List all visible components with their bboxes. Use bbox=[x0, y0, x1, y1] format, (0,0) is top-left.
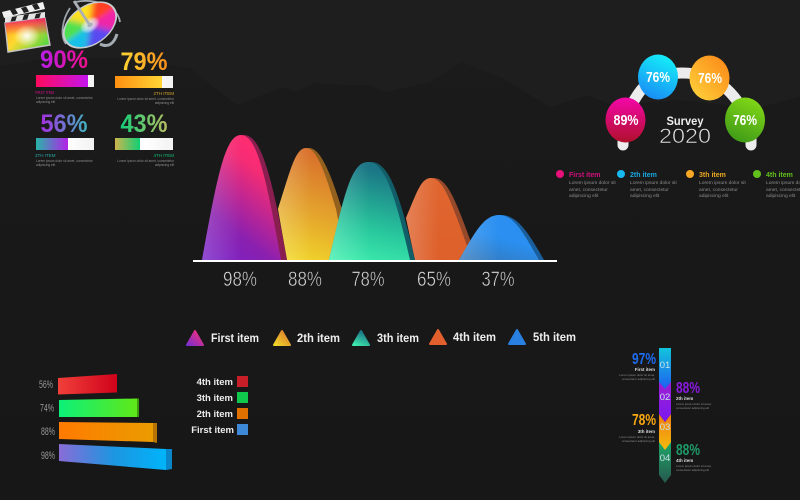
legend: hills: 3th item bbox=[377, 333, 419, 345]
value labels: 78% bbox=[352, 268, 384, 291]
circle 76 percent orange bbox=[690, 56, 730, 100]
stat: 43 percent: adipiscing elit bbox=[155, 163, 174, 167]
stat: 56 percent bbox=[35, 110, 94, 167]
legend: horizontal bars bbox=[191, 376, 248, 436]
stat: 43 percent: Lorem ipsum dolor sit amet, consectetur bbox=[117, 159, 175, 163]
legend: survey: First item bbox=[569, 172, 601, 179]
step 88 percent green: 88% bbox=[676, 442, 700, 459]
stat: 79 percent bbox=[115, 48, 175, 105]
stat: 90 percent bbox=[35, 46, 94, 104]
stat: 43 percent bbox=[115, 110, 175, 167]
legend: survey: Lorem ipsum dolor sit bbox=[630, 180, 677, 186]
chart: 3D horizontal bars bbox=[39, 374, 172, 470]
step numbers: 01 bbox=[660, 360, 670, 371]
step 88 percent purple: 2th item bbox=[676, 396, 693, 401]
value labels: 98% bbox=[223, 268, 257, 291]
step 88 percent green: consectetur adipiscing elit bbox=[676, 468, 709, 472]
legend: hills: 4th item bbox=[453, 332, 496, 344]
value labels: 37% bbox=[482, 268, 514, 291]
step 97 percent: consectetur adipiscing elit bbox=[622, 377, 655, 381]
hill 2 bbox=[278, 148, 352, 260]
bar 98 percent: 98% bbox=[41, 450, 55, 462]
circle 76 percent blue bbox=[638, 54, 678, 100]
bar 74 percent: 74% bbox=[40, 402, 54, 414]
panel: progress bars bbox=[35, 46, 175, 167]
legend: hills bbox=[187, 330, 576, 345]
step 97 percent bbox=[619, 351, 656, 381]
legend: survey: adipiscing elit bbox=[699, 193, 729, 199]
step 88 percent purple: 88% bbox=[676, 380, 700, 397]
baseline bbox=[193, 260, 557, 262]
bar 56 percent: 56% bbox=[39, 379, 53, 391]
legend: survey: amet, consectetur bbox=[699, 187, 738, 193]
stat: 90 percent: adipiscing elit bbox=[36, 100, 55, 104]
stat: 79 percent: Lorem ipsum dolor sit amet, consectetur bbox=[117, 97, 175, 101]
legend: survey: adipiscing elit bbox=[766, 193, 796, 199]
legend: survey: amet, consectetur bbox=[630, 187, 669, 193]
legend: horizontal bars: 3th item bbox=[197, 393, 233, 404]
stat: 79 percent: 79% bbox=[120, 48, 168, 76]
legend: hills: 2th item bbox=[297, 333, 340, 345]
legend: survey: 3th item bbox=[699, 172, 726, 179]
circle 76 percent blue: 76% bbox=[646, 70, 670, 86]
hill 4 bbox=[406, 178, 478, 260]
legend: horizontal bars: 2th item bbox=[197, 409, 233, 420]
chart: hills bbox=[193, 135, 557, 291]
step numbers: 03 bbox=[660, 422, 670, 433]
step 97 percent: 97% bbox=[632, 351, 656, 368]
legend: survey: 2th item bbox=[630, 172, 657, 179]
stat: 90 percent: 90% bbox=[40, 46, 88, 74]
legend: horizontal bars: 4th item bbox=[197, 377, 233, 388]
step 97 percent: First item bbox=[635, 367, 655, 372]
legend: survey: Lorem ipsum dolor sit bbox=[699, 180, 746, 186]
circle 76 percent orange: 76% bbox=[698, 71, 722, 87]
circle 76 percent green: 76% bbox=[733, 113, 757, 129]
step 88 percent green bbox=[676, 442, 712, 472]
legend: survey: amet, consectetur bbox=[569, 187, 608, 193]
legend: survey: 4th item bbox=[766, 172, 793, 179]
arrow segment 01 bbox=[659, 348, 671, 389]
circle 76 percent green bbox=[725, 98, 765, 142]
hill 3 bbox=[329, 162, 415, 260]
stat: 56 percent: 3TH ITEM bbox=[35, 153, 56, 158]
arrow segment 02 bbox=[659, 380, 671, 422]
hill 1 bbox=[202, 135, 287, 260]
stat: 79 percent: adipiscing elit bbox=[155, 101, 174, 105]
legend: survey bbox=[556, 170, 800, 199]
step 88 percent green: 4th item bbox=[676, 458, 693, 463]
arrow segment 03 bbox=[659, 414, 671, 450]
stat: 43 percent: 43% bbox=[120, 110, 168, 138]
step numbers bbox=[660, 360, 670, 464]
legend: survey: adipiscing elit bbox=[630, 193, 660, 199]
survey title bbox=[659, 114, 711, 148]
stat: 56 percent: 56% bbox=[40, 110, 88, 138]
legend: survey: Lorem ipsum dolor sit bbox=[569, 180, 616, 186]
value labels bbox=[223, 268, 514, 291]
circle 89 percent bbox=[606, 98, 646, 142]
step numbers: 02 bbox=[660, 392, 670, 403]
stat: 56 percent: adipiscing elit bbox=[36, 163, 55, 167]
legend: horizontal bars: First item bbox=[191, 425, 234, 436]
legend: hills: 5th item bbox=[533, 332, 576, 344]
legend: survey: adipiscing elit bbox=[569, 193, 599, 199]
icon: motion disc bbox=[62, 0, 121, 49]
arc bbox=[623, 73, 751, 145]
panel: vertical arrow timeline bbox=[619, 348, 712, 483]
hill 5 bbox=[459, 215, 544, 260]
value labels: 65% bbox=[417, 268, 451, 291]
step 88 percent purple: consectetur adipiscing elit bbox=[676, 406, 709, 410]
step 88 percent purple bbox=[676, 380, 712, 410]
step 78 percent: consectetur adipiscing elit bbox=[622, 439, 655, 443]
step 78 percent: Lorem ipsum dolor sit amet, bbox=[619, 435, 655, 439]
stat: 56 percent: Lorem ipsum dolor sit amet, consectetur bbox=[36, 159, 94, 163]
stat: 90 percent: FIRST ITEM bbox=[35, 90, 54, 95]
legend: hills: First item bbox=[211, 333, 259, 345]
panel: survey arc bbox=[606, 54, 765, 148]
survey title: 2020 bbox=[659, 125, 711, 148]
step 78 percent bbox=[619, 412, 656, 443]
bar 88 percent: 88% bbox=[41, 426, 55, 438]
value labels: 88% bbox=[288, 268, 322, 291]
step 78 percent: 3th item bbox=[638, 429, 655, 434]
circle 89 percent: 89% bbox=[614, 113, 639, 129]
arrow segment 04 bbox=[659, 441, 671, 483]
stat: 90 percent: Lorem ipsum dolor sit amet, consectetur bbox=[36, 96, 94, 100]
icon: clapperboard bbox=[2, 2, 50, 52]
survey title: Survey bbox=[666, 114, 704, 128]
step 97 percent: Lorem ipsum dolor sit amet, bbox=[619, 373, 655, 377]
step 88 percent purple: Lorem ipsum dolor sit amet, bbox=[676, 402, 712, 406]
stat: 43 percent: 4TH ITEM bbox=[153, 153, 174, 158]
step numbers: 04 bbox=[660, 453, 670, 464]
stat: 79 percent: 2TH ITEM bbox=[153, 91, 174, 96]
step 78 percent: 78% bbox=[632, 412, 656, 429]
step 88 percent green: Lorem ipsum dolor sit amet, bbox=[676, 464, 712, 468]
